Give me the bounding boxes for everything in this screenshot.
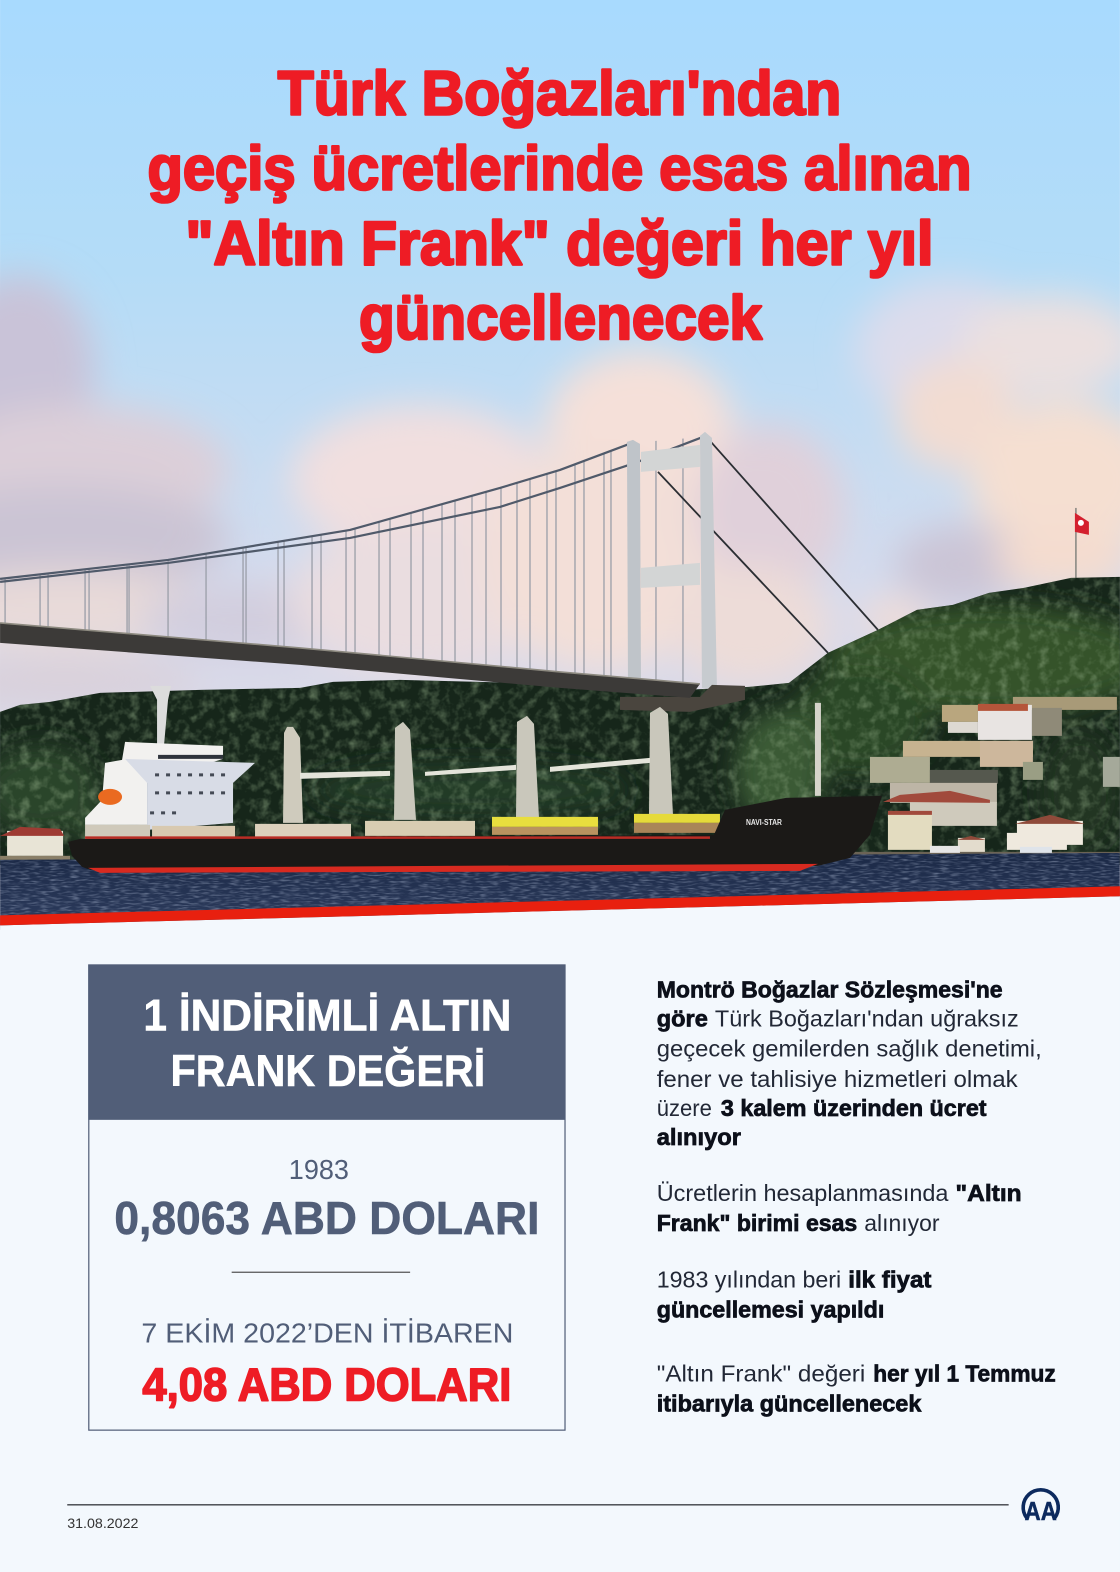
text block: first update: ilk fiyat <box>848 1266 932 1292</box>
text block: calculation <box>657 1180 1022 1236</box>
text block: first update <box>657 1266 932 1322</box>
title <box>147 59 972 353</box>
title: "Altın Frank" değeri her yıl <box>186 210 933 279</box>
cargo ship <box>68 686 882 873</box>
panel: gold franc value <box>88 964 566 1430</box>
hillside <box>0 577 1120 865</box>
text block: convention: alınıyor <box>657 1124 741 1150</box>
text block: convention <box>657 977 1042 1150</box>
new value: 4,08 ABD DOLARI <box>142 1359 511 1411</box>
title: Türk Boğazları'ndan <box>278 59 841 128</box>
bridge towers <box>627 432 717 688</box>
text block: first update: 1983 yılından beri <box>657 1266 841 1292</box>
icon: agency logo: AA <box>1025 1496 1057 1526</box>
superstructure side <box>85 742 223 825</box>
bridge hangers <box>5 430 683 690</box>
divider <box>232 1271 410 1273</box>
text block: convention: üzere <box>657 1095 712 1121</box>
text block: first update: güncellemesi yapıldı <box>657 1296 884 1322</box>
bow mast <box>815 703 821 796</box>
text block: yearly update: "Altın Frank" değeri <box>657 1361 865 1387</box>
old value: 0,8063 ABD DOLARI <box>114 1192 539 1244</box>
panel header <box>88 964 566 1120</box>
turkish flag <box>1075 508 1089 578</box>
text block: calculation: Frank" birimi esas <box>657 1210 857 1236</box>
title: geçiş ücretlerinde esas alınan <box>147 134 972 203</box>
superstructure windows <box>158 755 223 759</box>
ship name: NAVI-STAR <box>746 818 782 827</box>
title: güncellenecek <box>359 284 762 353</box>
date label: 7 EKİM 2022’DEN İTİBAREN <box>141 1317 513 1348</box>
white area under band <box>0 896 1120 1572</box>
bridge back-stay cables <box>658 442 878 653</box>
photo: Bosphorus bridge and cargo ship <box>0 0 1120 935</box>
superstructure face <box>125 759 255 830</box>
bridge main cables <box>0 437 703 582</box>
text block: convention: göre <box>657 1006 708 1032</box>
red diagonal band <box>0 886 1120 925</box>
waterfront buildings <box>0 697 1120 860</box>
radar mast <box>150 686 171 745</box>
clouds <box>0 275 1120 706</box>
tree texture <box>0 570 1120 865</box>
text block: convention: Türk Boğazları'ndan uğraksız <box>715 1006 1019 1032</box>
deck red stripe <box>85 836 710 839</box>
lifeboat <box>98 789 122 805</box>
footer rule <box>67 1504 1009 1506</box>
cargo hatches <box>85 814 720 839</box>
ship cranes <box>283 707 673 823</box>
text block: calculation: "Altın <box>956 1180 1022 1206</box>
text block: convention: Montrö Boğazlar Sözleşmesi'ne <box>657 977 1003 1003</box>
text block: calculation: Ücretlerin hesaplanmasında <box>657 1180 949 1206</box>
bridge pier <box>620 685 745 712</box>
small windows <box>150 775 228 813</box>
panel header: 1 İNDİRİMLİ ALTIN <box>143 992 511 1041</box>
text block: calculation: alınıyor <box>864 1210 940 1236</box>
water <box>0 850 1120 935</box>
sky <box>0 0 1120 900</box>
ship hull <box>68 796 882 870</box>
text block: convention: 3 kalem üzerinden ücret <box>721 1095 987 1121</box>
text block: convention: geçecek gemilerden sağlık denetimi, <box>657 1036 1042 1062</box>
text block: yearly update: her yıl 1 Temmuz <box>873 1361 1056 1387</box>
year 1983: 1983 <box>289 1154 349 1185</box>
deck rail highlight <box>0 623 700 684</box>
panel header: FRANK DEĞERİ <box>171 1046 485 1096</box>
panel frame <box>89 965 565 1430</box>
waterline <box>88 864 818 873</box>
text block: yearly update: itibarıyla güncellenecek <box>657 1391 922 1417</box>
text block: convention: fener ve tahlisiye hizmetleri olmak <box>657 1066 1018 1092</box>
date: 31.08.2022 <box>67 1515 139 1531</box>
bridge deck <box>0 623 700 698</box>
text block: yearly update <box>657 1361 1056 1417</box>
